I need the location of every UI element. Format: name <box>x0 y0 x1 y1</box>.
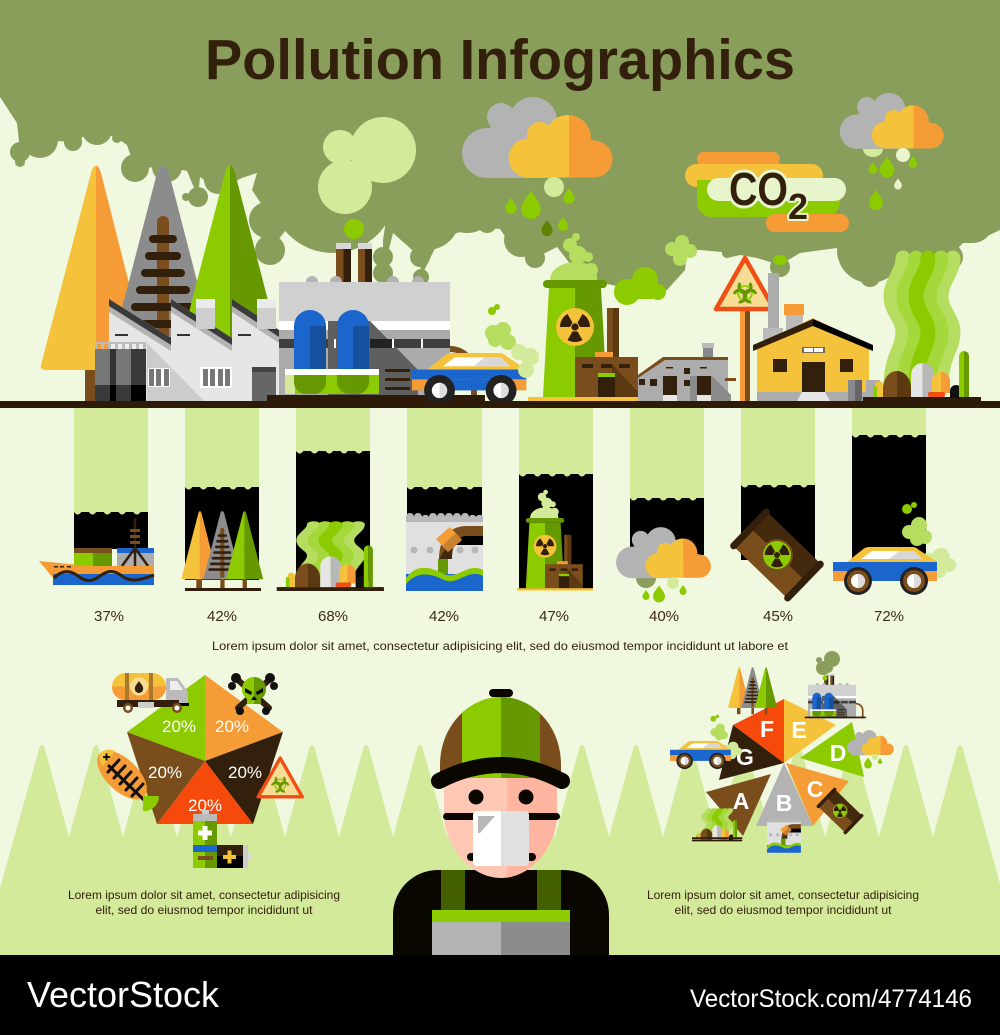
worker figure with mask <box>393 689 609 955</box>
big blue-tank factory <box>267 243 485 401</box>
CO2 label: CO <box>729 163 788 215</box>
seven-segment chart: F <box>760 716 774 742</box>
right text block <box>647 888 919 917</box>
pale smoke puff <box>318 117 416 214</box>
bar 4: water pipe 42% <box>406 408 483 625</box>
seven-segment chart: G <box>736 744 754 770</box>
bar 5: reactor 47%: 47% <box>539 608 569 625</box>
icon: hazard sign small <box>258 758 302 797</box>
right text block: elit, sed do eiusmod tempor incididunt ut <box>674 903 892 917</box>
bar 1: ship 37%: 37% <box>94 608 124 625</box>
icon: batteries <box>193 810 252 868</box>
icon: small car <box>670 715 742 769</box>
low grey building <box>638 343 736 401</box>
bar 6: acid rain 40%: 40% <box>649 608 679 625</box>
exhaust puffs <box>485 304 539 378</box>
pentagon pie chart: 20% <box>215 717 249 736</box>
right text block: Lorem ipsum dolor sit amet, consectetur adipisicing <box>647 888 919 902</box>
seven-segment chart: A <box>733 788 749 814</box>
CO2 label <box>685 152 849 232</box>
pentagon pie chart: 20% <box>148 763 182 782</box>
acid rain cloud right <box>840 93 944 210</box>
CO2 label: 2 <box>788 186 808 227</box>
seven-segment chart: E <box>791 717 807 743</box>
pentagon pie chart: 20% <box>228 763 262 782</box>
left text block: Lorem ipsum dolor sit amet, consectetur adipisicing <box>68 888 340 902</box>
ground line <box>0 401 1000 408</box>
seven-segment chart: B <box>776 790 792 816</box>
bar 2: forest 42% <box>182 408 263 625</box>
bar 5: reactor 47% <box>517 408 593 625</box>
bar 3: waste 68%: 68% <box>318 608 348 625</box>
seven-segment chart: D <box>830 740 846 766</box>
bar 4: water pipe 42%: 42% <box>429 608 459 625</box>
bar 3: waste 68% <box>277 408 384 625</box>
icon: small acid cloud <box>847 730 894 768</box>
icon: skull and bones <box>228 673 278 715</box>
icon: small factory with smoke <box>805 651 866 718</box>
caption text: Lorem ipsum dolor sit amet, consectetur adipisicing elit, sed do eiusmod tempor incididunt ut labore et <box>212 639 789 653</box>
smog cloud <box>0 0 1000 292</box>
left text block: elit, sed do eiusmod tempor incididunt ut <box>96 903 313 917</box>
nuclear reactor <box>528 233 655 401</box>
icon: small trees <box>728 667 777 714</box>
mountain silhouette background <box>0 745 1000 955</box>
bar 7: toxic barrel 45%: 45% <box>763 608 793 625</box>
biohazard sign <box>716 258 774 401</box>
pentagon pie chart: 20% <box>162 717 196 736</box>
icon: small barrel <box>816 787 864 835</box>
footer bar <box>0 955 1000 1035</box>
icon: oil truck <box>112 673 189 713</box>
forest trees <box>41 166 286 401</box>
bar 1: ship 37% <box>39 408 154 625</box>
seven-segment chart <box>706 699 864 836</box>
footer url: VectorStock.com/4774146 <box>690 985 972 1013</box>
yellow house <box>753 273 873 401</box>
icon: small water pipe <box>767 818 801 853</box>
seven-segment chart: C <box>807 776 823 802</box>
bar 8: car 72% <box>833 408 956 625</box>
toxic waste site with gas <box>848 258 981 401</box>
bar 2: forest 42%: 42% <box>207 608 237 625</box>
icon: dead fish <box>89 742 159 811</box>
bar 7: toxic barrel 45% <box>729 408 825 625</box>
green smoke dot <box>344 219 364 239</box>
title: Pollution Infographics <box>205 28 795 92</box>
bar 6: acid rain 40% <box>616 408 711 625</box>
acid rain cloud centre <box>462 97 612 236</box>
left text block <box>68 888 340 917</box>
pentagon pie chart: 20% <box>188 796 222 815</box>
icon: small waste site <box>692 810 742 841</box>
pentagon pie chart <box>127 675 283 824</box>
white sawtooth factory <box>95 299 279 401</box>
footer logo: VectorStock <box>27 974 220 1015</box>
car on road <box>412 353 526 406</box>
bar 8: car 72%: 72% <box>874 608 904 625</box>
green smoke puffs <box>614 235 787 305</box>
